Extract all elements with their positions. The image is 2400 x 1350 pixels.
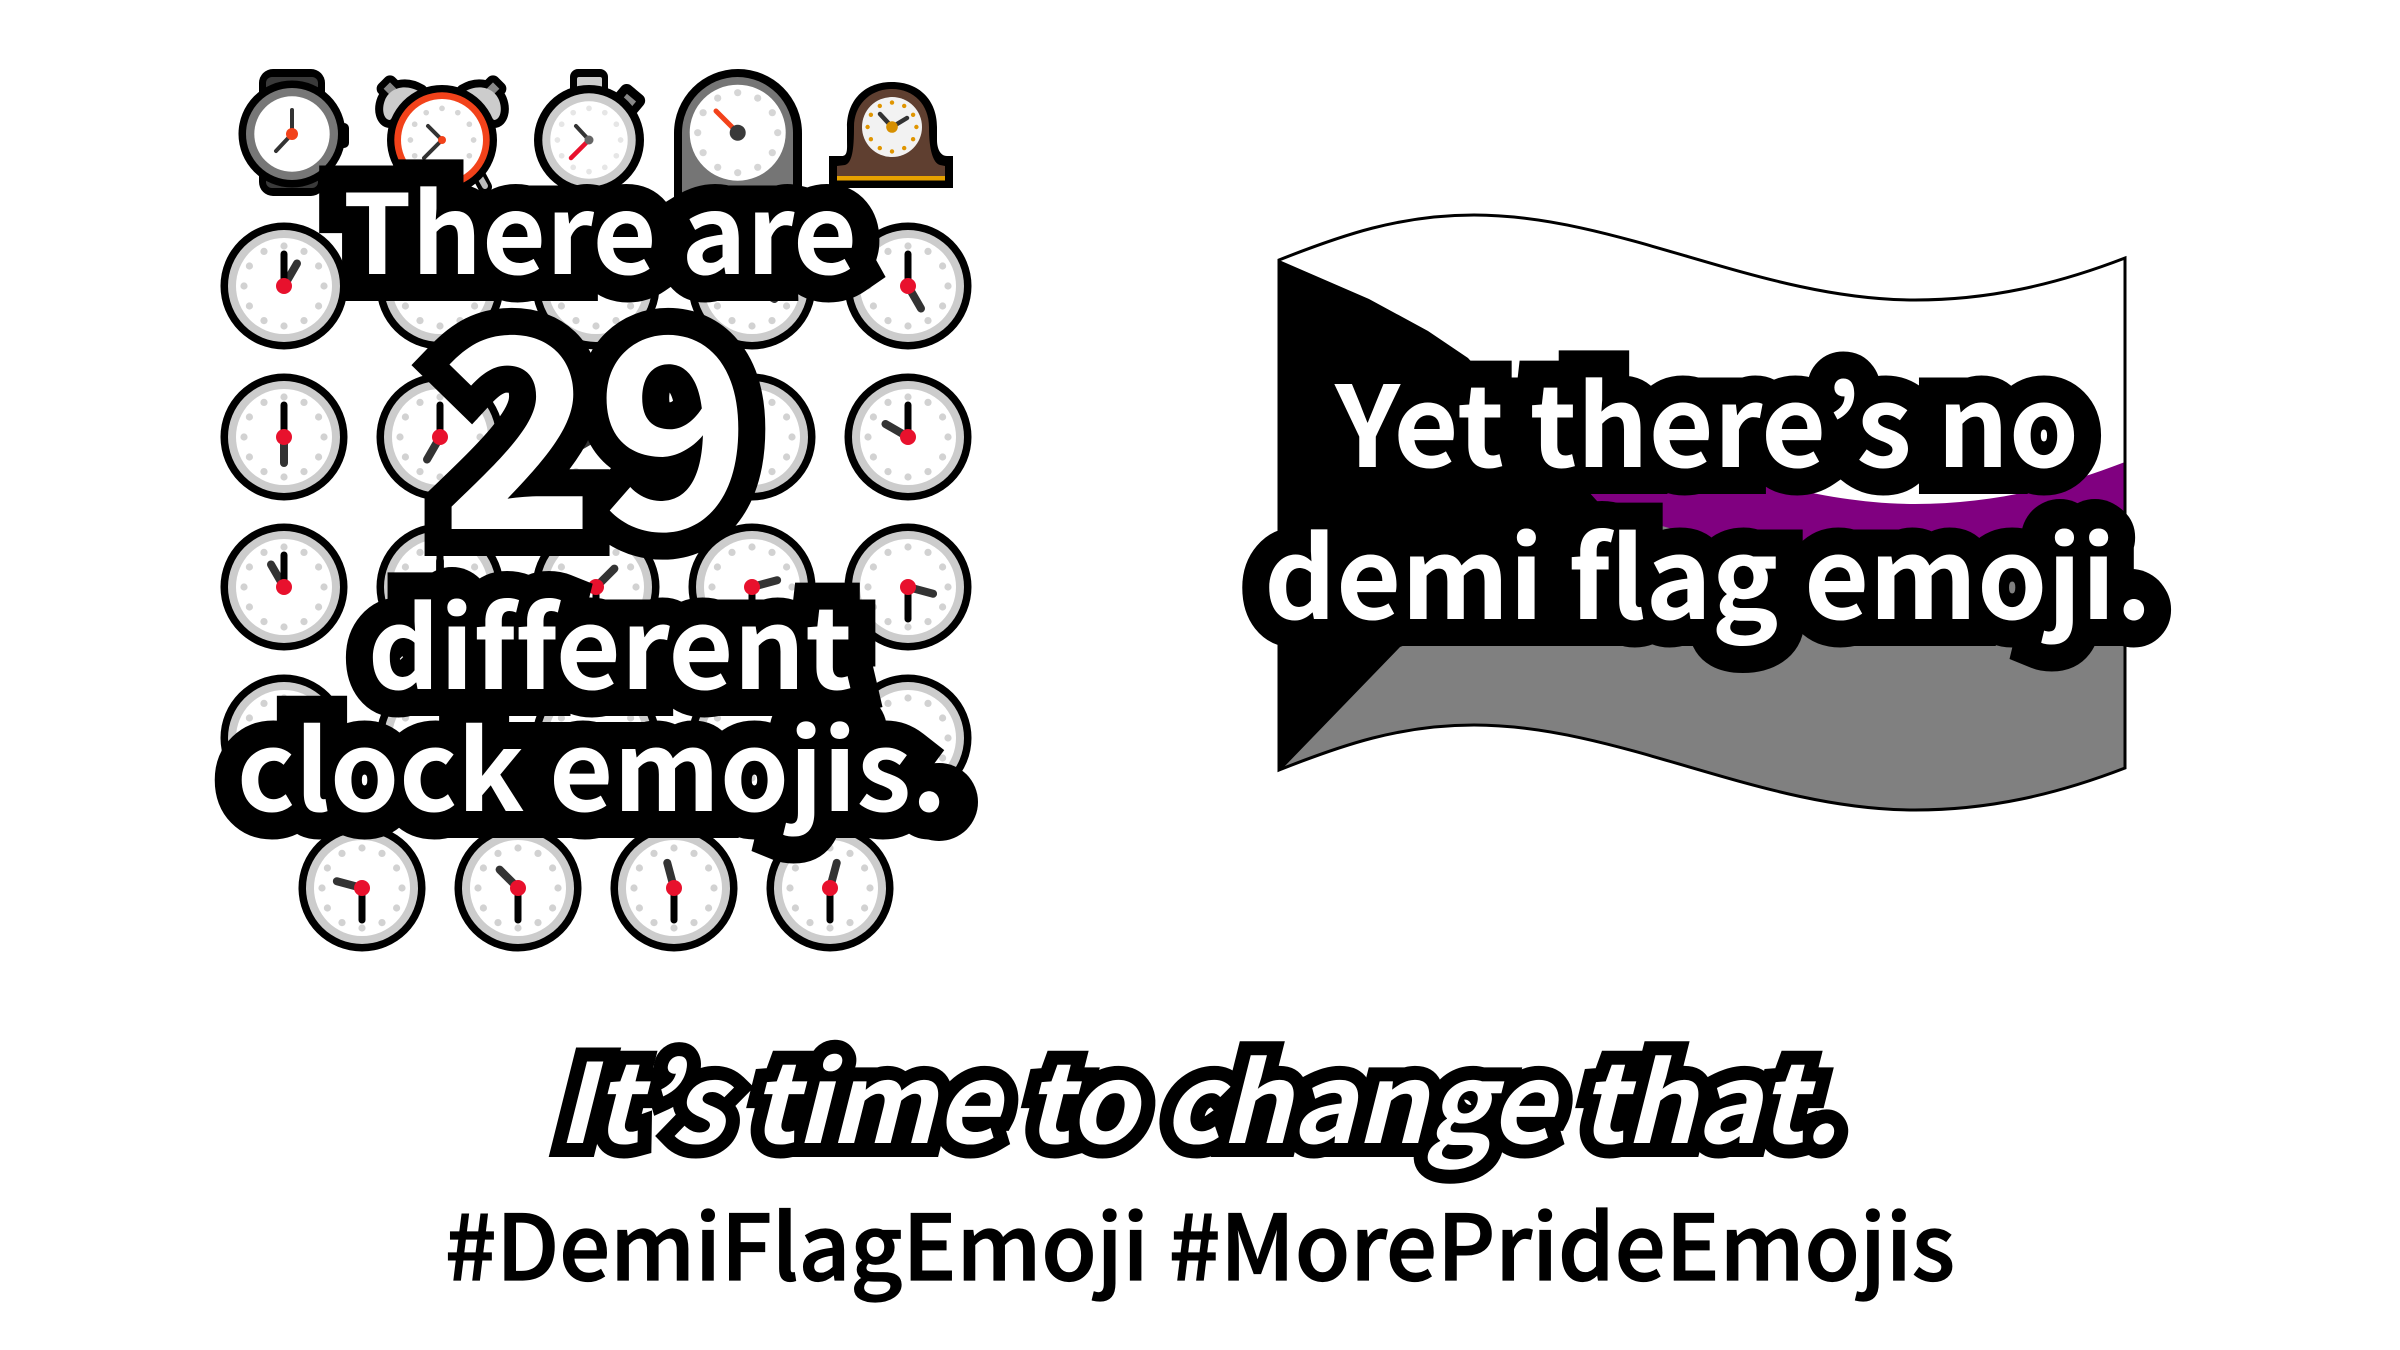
tagline: It’s time to change that. — [557, 1015, 1839, 1175]
icon: demisexual flag — [1278, 214, 2126, 812]
clock grid: row 3 — [220, 524, 972, 650]
panel: clock emojis — [220, 69, 972, 952]
clock grid: row 4 — [220, 674, 972, 802]
icon: mantel clock — [829, 82, 953, 188]
hashtags: #DemiFlagEmoji #MorePrideEmojis — [445, 1176, 1955, 1306]
big number 29: 29 — [440, 224, 752, 606]
heading: different: different — [368, 560, 852, 722]
text: yet there's no: Yet there’s no — [1334, 338, 2079, 500]
clock grid: row 1 — [220, 222, 972, 350]
icon: wristwatch — [238, 69, 349, 196]
clock grid: row 2 — [220, 374, 972, 500]
heading: clock emojis: clock emojis. — [237, 683, 947, 843]
icon: alarm clock — [383, 82, 501, 195]
clock grid: row 5 — [298, 824, 894, 952]
heading: there are: There are — [343, 146, 857, 306]
icon: analog clock with arched case — [674, 69, 802, 200]
text: demi flag emoji: demi flag emoji. — [1264, 490, 2152, 652]
icon: stopwatch — [534, 69, 648, 195]
